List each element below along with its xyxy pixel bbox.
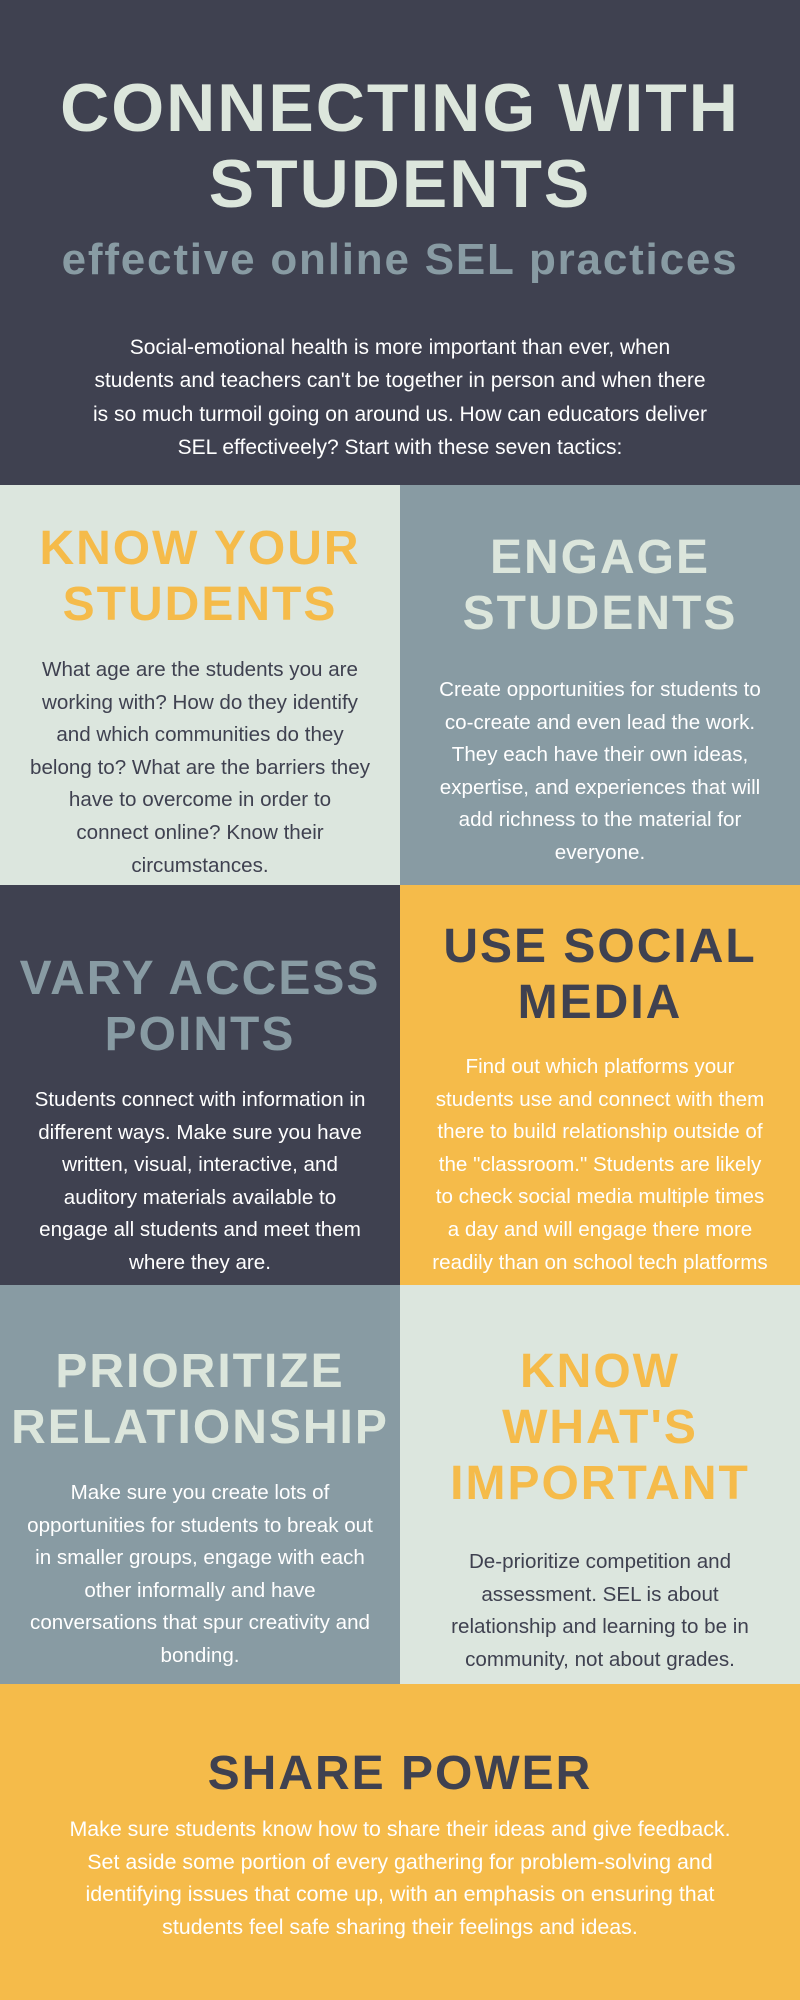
panel: engage students	[400, 485, 800, 885]
body: add richness to the material for	[459, 808, 741, 831]
title: CONNECTING WITH	[60, 70, 740, 146]
heading	[443, 920, 757, 1029]
body: circumstances.	[131, 854, 269, 877]
body: What age are the students you are	[42, 658, 358, 681]
heading	[11, 1345, 389, 1454]
heading	[39, 522, 361, 631]
subtitle: effective online SEL practices	[62, 235, 738, 284]
panel: vary access points	[0, 885, 400, 1285]
heading: STUDENTS	[63, 578, 337, 631]
body: connect online? Know their	[76, 821, 324, 844]
heading: KNOW YOUR	[39, 522, 361, 575]
body: bonding.	[160, 1644, 240, 1667]
body: identifying issues that come up, with an emphasis on ensuring that	[85, 1882, 714, 1906]
body: other informally and have	[84, 1579, 316, 1602]
heading: MEDIA	[518, 976, 682, 1029]
body: relationship and learning to be in	[451, 1615, 749, 1638]
body: different ways. Make sure you have	[38, 1121, 362, 1144]
body	[30, 658, 370, 877]
body: Set aside some portion of every gathering for problem-solving and	[87, 1850, 713, 1874]
heading: ENGAGE	[490, 531, 710, 584]
heading: POINTS	[105, 1008, 295, 1061]
panel: prioritize relationship	[0, 1285, 400, 1685]
panel: use social media	[400, 885, 800, 1285]
body: students feel safe sharing their feelings and ideas.	[162, 1915, 638, 1939]
header	[0, 0, 800, 485]
body	[27, 1481, 373, 1667]
body: belong to? What are the barriers they	[30, 756, 370, 779]
body: readily than on school tech platforms	[432, 1251, 768, 1274]
body: have to overcome in order to	[69, 788, 331, 811]
heading: KNOW	[520, 1345, 680, 1398]
heading: USE SOCIAL	[443, 920, 757, 973]
intro text: Social-emotional health is more important than ever, when students and teachers can't be together in person and when there is so much turmoil going on around us. How can educators deliver SEL effectiveely? Start with these seven tactics:	[93, 336, 707, 459]
body	[69, 1817, 731, 1939]
body: where they are.	[129, 1251, 271, 1274]
body: community, not about grades.	[465, 1648, 735, 1671]
heading: STUDENTS	[463, 587, 737, 640]
heading: SHARE POWER	[208, 1747, 592, 1800]
heading: VARY ACCESS	[20, 952, 380, 1005]
body: assessment. SEL is about	[481, 1583, 719, 1606]
body: auditory materials available to	[64, 1186, 336, 1209]
body: Create opportunities for students to	[439, 678, 761, 701]
body: written, visual, interactive, and	[62, 1153, 338, 1176]
body: a day and will engage there more	[448, 1218, 752, 1241]
heading	[20, 952, 380, 1061]
panel: know your students	[0, 485, 400, 885]
heading: PRIORITIZE	[55, 1345, 345, 1398]
heading: IMPORTANT	[450, 1457, 750, 1510]
body: Make sure students know how to share their ideas and give feedback.	[69, 1817, 731, 1841]
body: to check social media multiple times	[436, 1185, 764, 1208]
heading	[463, 531, 737, 640]
body	[432, 1055, 768, 1274]
body: opportunities for students to break out	[27, 1514, 373, 1537]
body: engage all students and meet them	[39, 1218, 361, 1241]
body: Find out which platforms your	[466, 1055, 734, 1078]
body: conversations that spur creativity and	[30, 1611, 370, 1634]
panel: know what's important	[400, 1285, 800, 1685]
title: STUDENTS	[209, 146, 591, 222]
body: Make sure you create lots of	[71, 1481, 329, 1504]
body: co-create and even lead the work.	[445, 711, 755, 734]
body: De-prioritize competition and	[469, 1550, 731, 1573]
body	[439, 678, 761, 864]
body: and which communities do they	[56, 723, 344, 746]
body: working with? How do they identify	[42, 691, 358, 714]
heading	[450, 1345, 750, 1510]
heading: WHAT'S	[502, 1401, 698, 1454]
body: everyone.	[555, 841, 645, 864]
body: expertise, and experiences that will	[440, 776, 760, 799]
title	[60, 70, 740, 222]
body: the "classroom." Students are likely	[439, 1153, 761, 1176]
body: Students connect with information in	[35, 1088, 365, 1111]
body: in smaller groups, engage with each	[35, 1546, 365, 1569]
body	[35, 1088, 365, 1274]
body: students use and connect with them	[436, 1088, 764, 1111]
body	[451, 1550, 749, 1671]
body: there to build relationship outside of	[437, 1120, 763, 1143]
panel: share power	[0, 1684, 800, 2000]
heading: RELATIONSHIP	[11, 1401, 389, 1454]
body: They each have their own ideas,	[452, 743, 748, 766]
